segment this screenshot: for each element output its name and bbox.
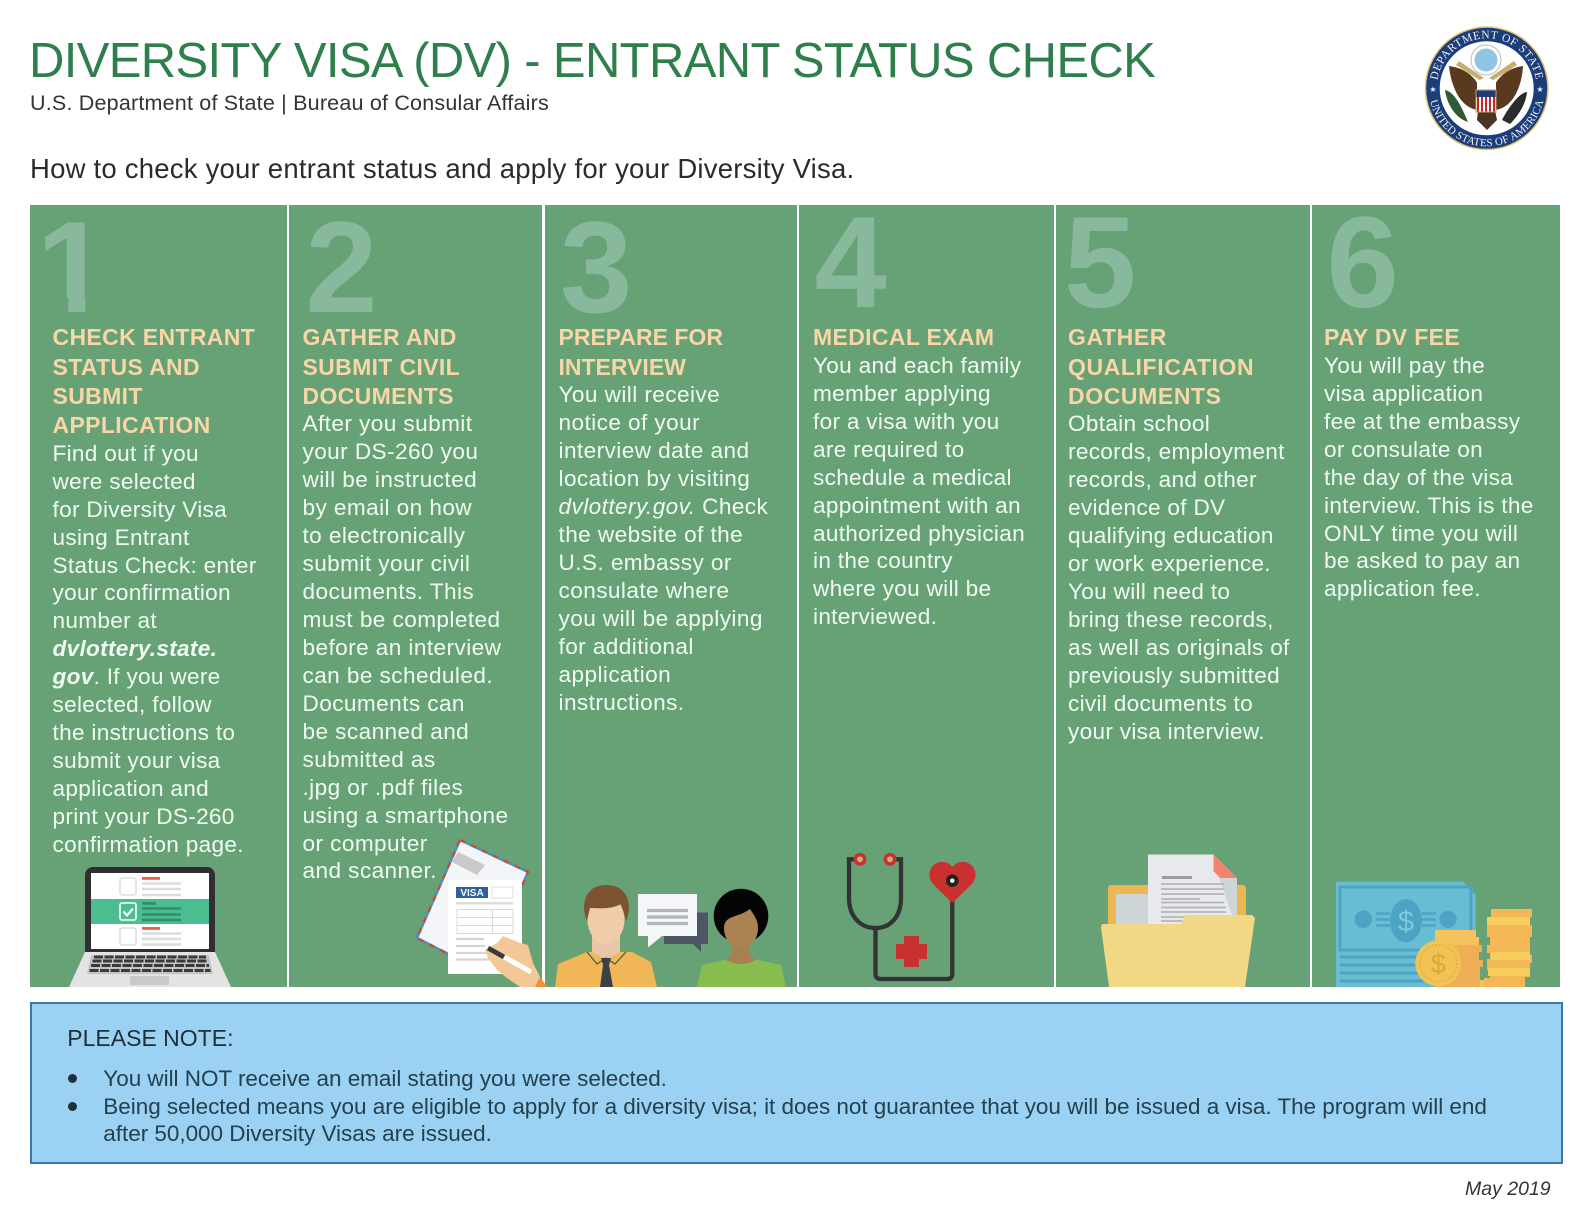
body text: visa application [1324,381,1483,406]
step number 5: 5 [1064,188,1136,334]
step number 1: 1 [36,194,109,340]
step number 6: 6 [1326,188,1399,334]
body text: authorized physician [813,521,1025,546]
heading: MEDICAL EXAM [813,324,994,350]
body text: You will receive [558,382,720,407]
body text: submit your visa [52,748,221,773]
body text: the day of the visa [1324,465,1513,490]
subtitle: U.S. Department of State | Bureau of Consular Affairs [30,91,549,115]
body text: number at [52,608,157,633]
body text: You will need to [1068,579,1230,604]
panel: step 2 [289,205,542,987]
body text: interviewed. [813,604,937,629]
body text: consulate where [558,578,729,603]
heading: QUALIFICATION [1068,354,1254,380]
body text: location by visiting [558,466,750,491]
body text: your DS-260 you [302,439,478,464]
body text: Find out if you [52,441,199,466]
step 2 text [302,324,508,883]
step 3 text [558,324,768,714]
date note: May 2019 [1465,1178,1551,1200]
body text: You will pay the [1324,353,1485,378]
body text: notice of your [558,410,700,435]
body text: print your DS-260 [52,804,235,829]
icon: visa documents and hand [416,839,547,987]
note line 1: You will NOT receive an email stating you were selected. [103,1066,667,1091]
panel: please note [30,1002,1563,1164]
body text: before an interview [302,635,501,660]
panel: step 6 [1312,205,1560,987]
body text [558,382,768,714]
body text: for Diversity Visa [52,497,227,522]
panel: step 5 [1056,205,1310,987]
body text: .jpg or .pdf files [302,775,463,800]
body text: dvlottery.gov. Check [558,494,768,519]
body text: your confirmation [52,580,231,605]
body text: records, employment [1068,439,1285,464]
body text: application and [52,776,209,801]
heading: PREPARE FOR [558,324,723,350]
body text: records, and other [1068,467,1257,492]
body text: Documents can [302,691,465,716]
icon: banknotes and coins [1336,882,1532,987]
body text: as well as originals of [1068,635,1290,660]
icon: laptop [69,867,231,987]
bullet 1 [68,1074,76,1083]
heading: DOCUMENTS [302,383,454,409]
body text: schedule a medical [813,465,1012,490]
body text: will be instructed [302,467,477,492]
icon: Department of State seal: DEPARTMENT OF STATE [1430,30,1544,80]
body text: must be completed [302,607,501,632]
panel: step 1 [30,205,287,987]
title: DIVERSITY VISA (DV) - ENTRANT STATUS CHECK [29,34,1155,88]
heading: CHECK ENTRANT [52,324,255,350]
body text: be asked to pay an [1324,548,1520,573]
heading: PAY DV FEE [1324,324,1460,350]
heading: STATUS AND [52,354,200,380]
body text: previously submitted [1068,663,1280,688]
step 1 text [52,324,257,857]
heading: INTERVIEW [558,354,686,380]
body text: U.S. embassy or [558,550,732,575]
body text: using Entrant [52,525,190,550]
body text [813,353,1025,629]
body text: member applying [813,381,991,406]
body text: submitted as [302,747,436,772]
bullet 2 [68,1102,76,1111]
heading: SUBMIT CIVIL [302,354,460,380]
heading [302,324,460,409]
step number 3: 3 [560,194,632,340]
heading: GATHER AND [302,324,457,350]
body text: are required to [813,437,964,462]
body text: for additional [558,634,694,659]
body text: for a visa with you [813,409,1000,434]
body text: dvlottery.state. [52,636,217,661]
body text: bring these records, [1068,607,1274,632]
step number 2: 2 [305,194,378,340]
panel: step 4 [799,205,1054,987]
icon: Department of State seal: UNITED STATES OF AMERICA [1430,99,1544,146]
heading [558,324,723,380]
body text: application [558,662,671,687]
icon: folder with document [1101,854,1255,987]
body text [1068,411,1290,744]
icon: visa documents and hand: VISA [460,888,484,899]
body text: be scanned and [302,719,469,744]
icon: banknotes and coins: $ [1431,949,1446,979]
note lines 2 and 3: Being selected means you are eligible to apply for a diversity visa; it does not guarantee that you will be issued a visa. The program will end [103,1094,1487,1118]
body text: After you submit [302,411,472,436]
heading: APPLICATION [52,412,211,438]
body text: by email on how [302,495,472,520]
body text: the instructions to [52,720,235,745]
body text: where you will be [813,576,991,601]
step 6 text [1324,324,1534,601]
body text: can be scheduled. [302,663,493,688]
body text: application fee. [1324,576,1481,601]
body text [302,411,508,883]
panel: step 3 [544,205,797,987]
icon: Department of State seal: ★ [1429,85,1437,94]
heading: SUBMIT [52,383,143,409]
heading: GATHER [1068,324,1167,350]
body text: using a smartphone [302,803,508,828]
step number 4: 4 [814,188,887,334]
step 5 text [1068,324,1290,744]
body text: gov. If you were [52,664,221,689]
body text: Status Check: enter [52,553,257,578]
icon: interview people with speech bubbles [555,885,786,987]
body text: submit your civil [302,551,470,576]
body text: civil documents to [1068,691,1253,716]
body text: or computer [302,831,428,856]
note heading: PLEASE NOTE: [67,1025,233,1051]
body text: were selected [52,469,196,494]
body text [52,441,257,857]
body text: Obtain school [1068,411,1210,436]
note lines 2 and 3 [103,1094,1487,1146]
heading [52,324,255,438]
icon: Department of State seal: ★ [1536,85,1544,94]
body text: interview. This is the [1324,493,1534,518]
body text [1324,353,1534,601]
body text: confirmation page. [52,832,244,857]
body text: your visa interview. [1068,719,1265,744]
body text: and scanner. [302,858,437,883]
body text: to electronically [302,523,465,548]
intro sentence: How to check your entrant status and apply for your Diversity Visa. [30,153,854,184]
heading: DOCUMENTS [1068,383,1222,409]
body text: evidence of DV [1068,495,1225,520]
heading [1068,324,1254,409]
body text: or consulate on [1324,437,1483,462]
body text: you will be applying [558,606,763,631]
icon: banknotes and coins: $ [1398,906,1414,938]
body text: qualifying education [1068,523,1274,548]
body text: instructions. [558,690,685,714]
note lines 2 and 3: after 50,000 Diversity Visas are issued. [103,1121,492,1146]
body text: fee at the embassy [1324,409,1520,434]
step 4 text [813,324,1025,629]
body text: ONLY time you will [1324,521,1518,546]
icon: stethoscope with heart [846,852,976,982]
body text: appointment with an [813,493,1021,518]
icon: Department of State seal [1424,26,1549,150]
body text: selected, follow [52,692,212,717]
body text: the website of the [558,522,743,547]
body text: or work experience. [1068,551,1271,576]
body text: in the country [813,548,953,573]
body text: You and each family [813,353,1021,378]
body text: interview date and [558,438,749,463]
body text: documents. This [302,579,474,604]
